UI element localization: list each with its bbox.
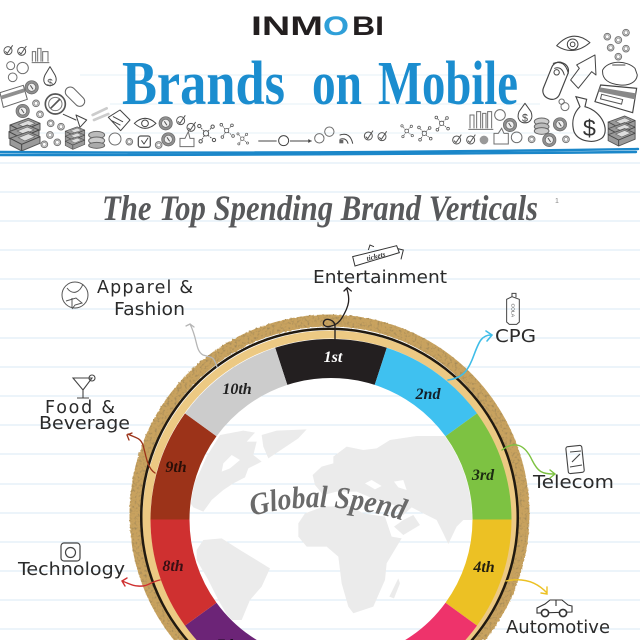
label: Automotive: Automotive: [506, 617, 610, 638]
title: Brands on Mobile: Mobile: [378, 50, 518, 118]
text: 1: [555, 198, 559, 205]
arrow: 10th to Apparel: [186, 324, 217, 367]
donut chart: spend rank segments: [150, 339, 512, 640]
rank labels: [162, 349, 495, 640]
rank labels: 2nd: [415, 386, 441, 403]
world map: [188, 429, 473, 620]
label: Food and Beverage: Beverage: [39, 414, 130, 434]
arrow: 2nd to CPG: [448, 331, 492, 380]
doodles: left header icons: [0, 45, 312, 151]
arrow: 9th to Food and Beverage: [127, 433, 155, 473]
label: Telecom: [532, 445, 614, 493]
icon: tickets: tickets: [365, 249, 386, 263]
logo: InMobi: BI: [352, 11, 384, 41]
rank labels: 4th: [472, 559, 495, 576]
icon: cocktail: [73, 375, 95, 398]
label: Technology: [17, 543, 125, 580]
label: Apparel and Fashion: Apparel &: [97, 278, 193, 298]
rank labels: 9th: [165, 459, 187, 476]
logo: InMobi: INM: [251, 11, 323, 41]
ring: textured gold frame: [129, 314, 529, 640]
logo: InMobi: O: [323, 11, 349, 41]
arrow: 4th to Automotive: [506, 580, 547, 594]
label: Entertainment: Entertainment: [313, 267, 447, 288]
label: CPG: CPG: [495, 326, 536, 347]
icon: hat: [62, 282, 88, 309]
label: Telecom: Telecom: [532, 472, 614, 493]
title: Brands on Mobile: on: [312, 50, 362, 118]
header divider: double blue stroke: [0, 149, 638, 155]
rank labels: 8th: [162, 558, 184, 575]
label: Entertainment: [313, 245, 447, 288]
icon: smartphone: [566, 445, 584, 474]
icon: car: [537, 600, 572, 617]
doodles: right header icons: [315, 29, 637, 147]
doodles: left header icons: $: [47, 78, 53, 89]
chart centre label: Global Spend: Global Spend: [250, 486, 409, 520]
arrow: 8th to Technology: [122, 578, 160, 586]
label: Technology: Technology: [17, 560, 125, 580]
label: Automotive: [506, 600, 610, 638]
title: Brands on Mobile: Brands: [122, 50, 285, 118]
chart centre label: Global Spend: [250, 486, 409, 520]
rank labels: 10th: [222, 381, 252, 398]
label: Food and Beverage: [39, 375, 130, 434]
heading: The Top Spending Brand Verticals: The Top Spending Brand Verticals: [102, 188, 538, 228]
arrow: 1st to Entertainment: [323, 288, 351, 340]
label: CPG: [495, 293, 536, 347]
doodles: right header icons: $: [522, 113, 528, 125]
rank labels: 1st: [324, 349, 343, 366]
icon: power camera: [61, 543, 80, 561]
label: Food and Beverage: Food &: [45, 398, 115, 418]
label: Apparel and Fashion: Fashion: [114, 300, 185, 320]
doodles: right header icons: $: [583, 115, 596, 141]
label: Apparel and Fashion: [62, 278, 193, 320]
logo: InMobi: [251, 11, 384, 41]
arrow: 3rd to Telecom: [502, 445, 555, 478]
icon: cola can: COLA: [510, 304, 516, 318]
rank labels: 3rd: [471, 467, 495, 484]
